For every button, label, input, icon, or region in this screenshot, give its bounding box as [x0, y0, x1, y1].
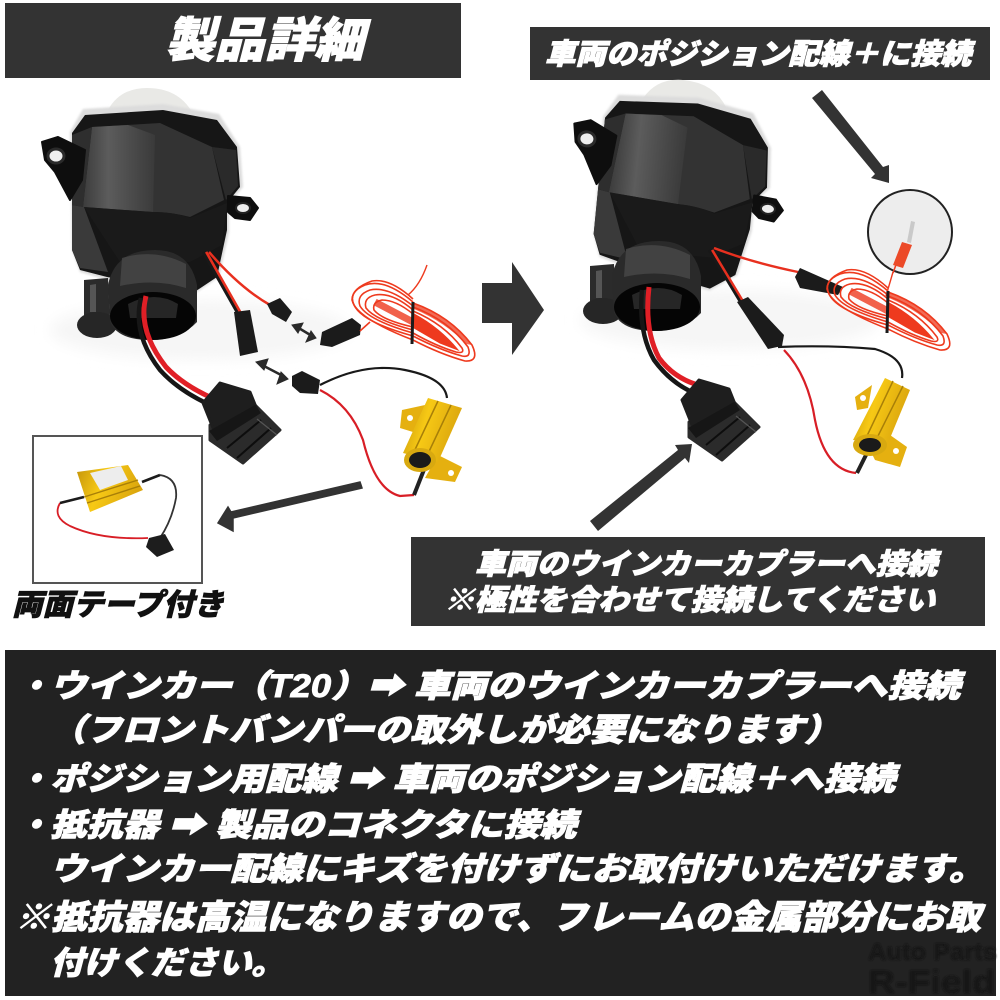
red wire coil	[352, 265, 475, 361]
arrow: to inset	[218, 482, 362, 531]
callout: turn signal connector: ※極性を合わせて接続してください	[444, 585, 936, 617]
arrow: to turn signal plug	[590, 444, 692, 531]
photo: lamp before connection	[42, 88, 475, 496]
panel: installation notes: （フロントバンパーの取外しが必要になります）	[50, 712, 840, 748]
panel: installation notes: ・	[18, 761, 50, 797]
resistor	[400, 398, 462, 482]
connection arrows	[256, 323, 316, 384]
inset: resistor with double-sided tape	[33, 436, 202, 583]
inset wires	[58, 475, 176, 538]
watermark: Auto Parts	[868, 939, 997, 966]
watermark: R-Field	[868, 964, 995, 1000]
title bar: 製品詳細	[165, 15, 371, 68]
panel: installation notes: 抵抗器 ➡ 製品のコネクタに接続	[50, 807, 582, 843]
panel: installation notes: ※抵抗器は高温になりますので、フレームの金属部分にお取	[15, 899, 986, 937]
callout: position wiring	[530, 27, 990, 80]
arrow: to position wire	[812, 90, 889, 183]
panel: installation notes: ウインカー配線にキズを付けずにお取付けいただけます。	[50, 851, 985, 887]
label: double-sided tape: 両面テープ付き	[12, 589, 224, 622]
inset resistor body	[77, 465, 143, 512]
zoom circle: stripped wire tip	[868, 190, 952, 274]
callout: turn signal connector	[411, 537, 985, 626]
resistor	[853, 378, 910, 467]
watermark	[868, 939, 997, 1000]
arrow: before to after	[482, 262, 544, 355]
resistor wires	[320, 368, 447, 496]
red wire coil	[827, 270, 950, 350]
title bar	[5, 3, 461, 78]
T20 plug	[682, 380, 759, 460]
resistor wires	[778, 346, 902, 473]
panel: installation notes: ・	[18, 668, 50, 704]
panel: installation notes	[5, 650, 996, 996]
photo: lamp after connection	[559, 70, 952, 473]
connectors	[234, 298, 361, 394]
callout: turn signal connector: 車両のウインカーカプラーへ接続	[475, 548, 942, 581]
lamp wires	[641, 248, 798, 392]
panel: installation notes: 付けください。	[50, 945, 285, 981]
panel: installation notes: ポジション用配線 ➡ 車両のポジション配線＋へ接続	[50, 761, 901, 797]
panel: installation notes: ウインカー（T20）➡ 車両のウインカーカプラーへ接続	[50, 668, 966, 704]
T20 plug	[203, 383, 280, 463]
inset connector	[146, 534, 174, 557]
connectors	[737, 268, 843, 349]
panel: installation notes: ・	[18, 807, 50, 843]
callout: position wiring: 車両のポジション配線＋に接続	[545, 38, 976, 71]
lamp wires	[139, 252, 270, 404]
